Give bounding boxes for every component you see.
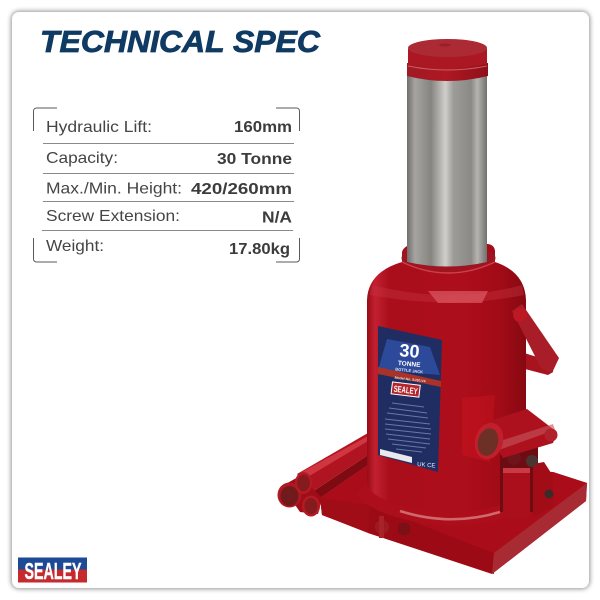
row: screw extension: Screw Extension: [46,208,180,225]
product label: Model No. SJ30.V4 [394,376,426,383]
jack handle strap [512,304,559,373]
row: capacity: 30 Tonne [217,151,292,168]
row: hydraulic lift [46,119,292,136]
product label [378,326,442,472]
row: weight: 17.80kg [229,241,290,258]
logo: Sealey: SEALEY [24,558,82,584]
product label: BOTTLE JACK [395,367,423,374]
row: max/min height: Max./Min. Height: [46,180,182,198]
jack cylinder body [357,244,533,526]
row: max/min height: 420/260mm [191,181,292,198]
title: TECHNICAL SPEC [40,24,321,59]
row: capacity [46,150,292,168]
row: capacity: Capacity: [46,150,118,167]
jack pump column [500,445,554,518]
jack ram rod [407,76,487,266]
row: hydraulic lift: 160mm [234,119,292,136]
row: screw extension: N/A [262,210,292,226]
jack base plate [320,465,587,574]
product label: UK CE [417,462,436,470]
table frame brackets [34,108,300,262]
label logo: SEALEY [393,384,418,396]
jack release valve [375,516,410,538]
row: screw extension [46,208,292,226]
jack ram cap [407,39,488,81]
jack pump socket [471,409,558,462]
panel: specification table [34,108,300,262]
row: hydraulic lift: Hydraulic Lift: [46,119,152,136]
row: weight [46,238,290,258]
row: max/min height [46,180,292,198]
jack handle socket bracket [521,352,553,375]
product label: TONNE [398,360,421,369]
jack left tubes [278,433,368,516]
label logo [390,381,421,398]
illustration: bottle jack [278,39,587,574]
row: weight: Weight: [46,238,104,255]
logo: Sealey [18,558,87,584]
product label: 30 [399,340,420,362]
